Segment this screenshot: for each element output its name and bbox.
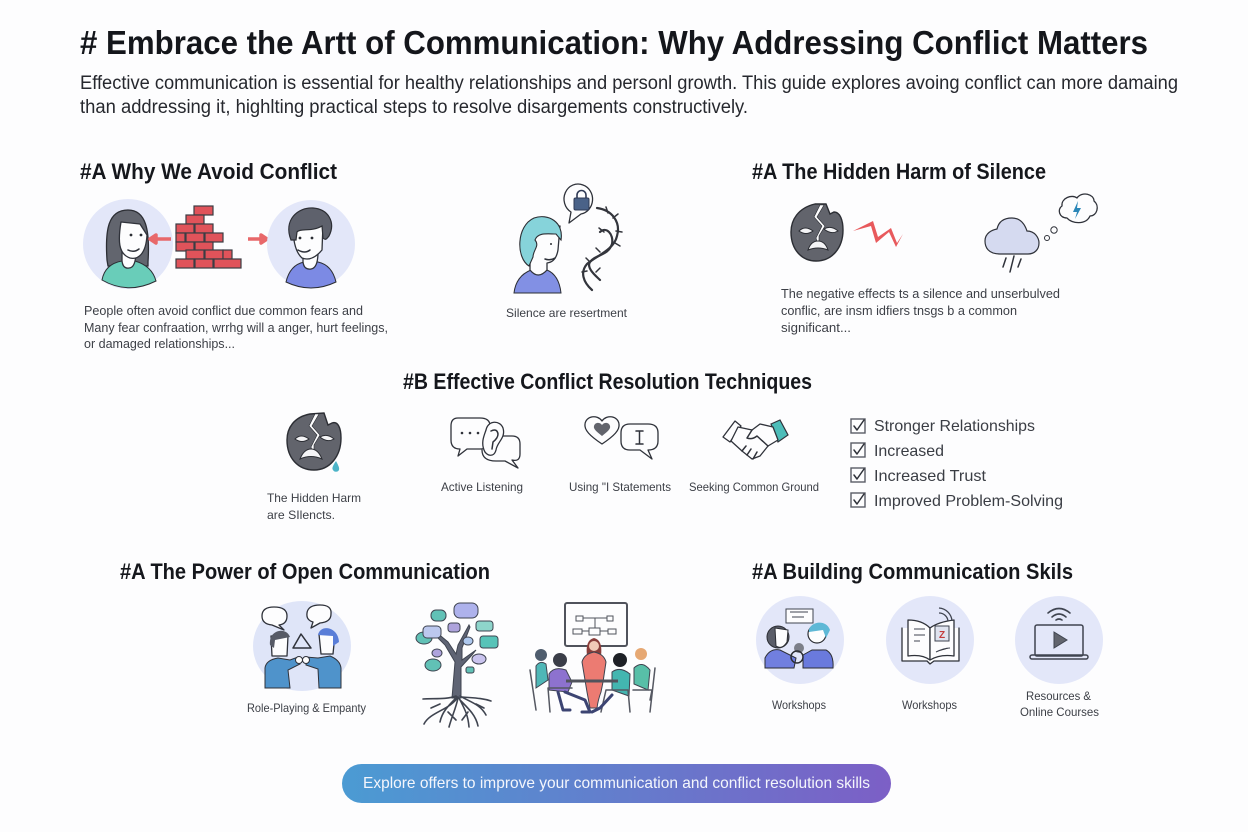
body text: why we avoid conflict: People often avoid conflict due common fears and: [84, 303, 363, 318]
icon: left arrow: [150, 235, 171, 243]
icon: tree with speech bubbles: [416, 603, 498, 727]
text: I statements: Using "I Statements: [569, 480, 671, 494]
icon: handshake: [723, 420, 788, 459]
intro paragraph: Effective communication is essential for healthy relationships and personl growth. This guide explores avoing conflict can more damaing: [80, 73, 1178, 94]
text: online courses: [1020, 689, 1099, 719]
panel: effective conflict resolution techniques: [267, 369, 1063, 522]
icon: heart and I bubble: [585, 417, 658, 459]
item: increased trust: Increased Trust: [874, 468, 987, 485]
icon: open book: Z: [939, 630, 945, 641]
icon: laptop with wifi: [1015, 596, 1103, 684]
item: improved problem-solving: Improved Problem-Solving: [874, 493, 1063, 510]
body text: hidden harm: conflic, are insm idfiers tnsgs b a common: [781, 303, 1017, 318]
intro paragraph: [80, 73, 1178, 118]
body text: hidden harm: [781, 286, 1060, 335]
item: stronger relationships: Stronger Relationships: [874, 418, 1035, 435]
icon: cracked mask with tear: [287, 413, 341, 472]
text: workshops second: Workshops: [902, 698, 957, 712]
resource: people workshop: [756, 596, 844, 712]
panel: why we avoid conflict: [80, 159, 388, 351]
text: workshops: Workshops: [772, 698, 826, 712]
technique: active listening: [441, 418, 523, 494]
panel: hidden harm of silence: [752, 159, 1097, 335]
text: role playing: Role-Playing & Empanty: [247, 701, 366, 715]
icon: people workshop: [756, 596, 844, 684]
text: common ground: Seeking Common Ground: [689, 480, 819, 494]
icon: man portrait: [267, 200, 355, 288]
icon: cracked mask: [791, 204, 843, 261]
icon: storm cloud with thought bubble: [985, 194, 1097, 272]
technique: using I statements: [569, 417, 671, 494]
panel: power of open communication: [120, 559, 655, 727]
resource: online courses: [1015, 596, 1103, 719]
text: active listening: Active Listening: [441, 480, 523, 494]
icon: team meeting at whiteboard: [530, 603, 655, 712]
technique: seeking common ground: [689, 420, 819, 494]
icon: role-playing people: [253, 601, 351, 691]
icon: speech bubbles and ear: [451, 418, 520, 468]
icon: right arrow: [248, 235, 267, 243]
text: hidden harm caption: [267, 491, 361, 522]
technique: hidden harm mask: [267, 413, 361, 522]
icon: woman portrait: [83, 199, 173, 289]
icon: brick wall: [176, 206, 241, 268]
icon: thorn vine: [582, 207, 622, 290]
text: hidden harm caption: The Hidden Harm: [267, 491, 361, 505]
heading: building skills: #A Building Communication Skils: [752, 559, 1073, 584]
icon: person with lock bubble and thorns: [514, 184, 622, 293]
body text: hidden harm: significant...: [781, 320, 851, 335]
text: hidden harm caption: are SIlencts.: [267, 508, 335, 522]
body text: hidden harm: The negative effects ts a silence and unserbulved: [781, 286, 1060, 301]
body text: why we avoid conflict: [84, 303, 388, 351]
icon: lock speech bubble: [564, 184, 593, 223]
resource: book: [886, 596, 974, 712]
heading: hidden harm of silence: #A The Hidden Harm of Silence: [752, 159, 1046, 184]
checklist: benefits: [851, 418, 1063, 510]
call to action button: [342, 764, 891, 803]
heading: techniques: #B Effective Conflict Resolution Techniques: [403, 369, 812, 394]
intro paragraph: than addressing it, highlting practical steps to resolve disargements constructively.: [80, 97, 748, 118]
text: online courses: Online Courses: [1020, 705, 1099, 719]
panel: building communication skills: [752, 559, 1103, 719]
heading: open communication: #A The Power of Open Communication: [120, 559, 490, 584]
title: # Embrace the Artt of Communication: Why Addressing Conflict Matters: [80, 24, 1148, 61]
call to action button: Explore offers to improve your communication and conflict resolution skills: [363, 775, 870, 792]
text: online courses: Resources &: [1026, 689, 1091, 703]
heading: why we avoid conflict: #A Why We Avoid Conflict: [80, 159, 338, 184]
text: silence caption: Silence are resertment: [506, 306, 628, 320]
body text: why we avoid conflict: or damaged relationships...: [84, 336, 235, 351]
panel: silence and resentment: [506, 184, 628, 320]
icon: red zigzag: [853, 221, 903, 247]
item: increased: Increased: [874, 443, 944, 460]
body text: why we avoid conflict: Many fear confraation, wrrhg will a anger, hurt feelings,: [84, 320, 388, 335]
